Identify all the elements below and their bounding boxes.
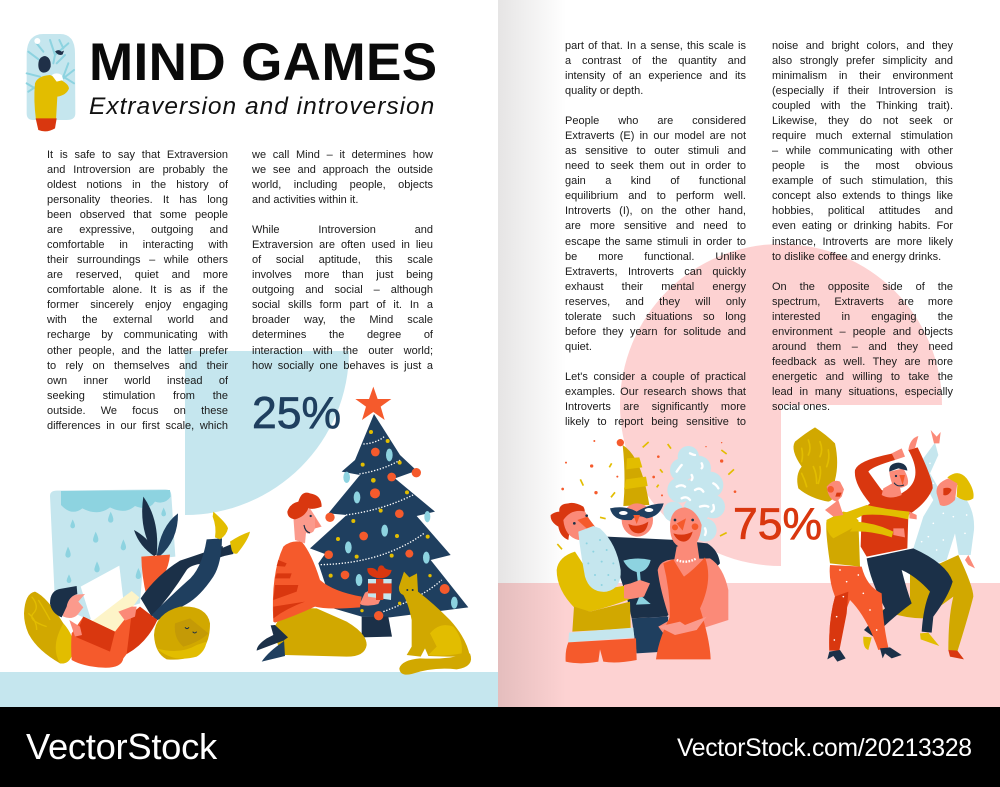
back dancer legs (882, 555, 973, 652)
bearded man (557, 552, 632, 612)
text column 4: feedback as well. They are more (772, 356, 953, 368)
masked man (607, 537, 720, 618)
text column 1: recharge by communicating with (47, 329, 228, 341)
text column 2: outgoing and social – although (252, 284, 433, 296)
text column 4: minimalism in their environment (772, 70, 953, 82)
text column 3: tolerate such situations so long (565, 311, 746, 323)
text column 1: and Introversion are probably the (47, 164, 228, 176)
text column 1: outside. We focus on these (47, 405, 228, 417)
text column 3: quality or depth. (565, 85, 643, 97)
left page floor band (0, 672, 498, 707)
text column 1: comfortable alone. It is as if the (47, 284, 228, 296)
text column 3: a contrast of the quantity and (565, 55, 746, 67)
text column 1 (47, 148, 228, 432)
text column 4: to dislike coffee and energy drinks. (772, 251, 941, 263)
text column 2: of social aptitude, this scale (252, 254, 433, 266)
text column 3: as sensitive to outer stimuli and (565, 145, 746, 157)
text column 4: – while communicating with other (772, 145, 953, 157)
text column 3: are more sensitive and need to (565, 220, 746, 232)
text column 1: other people, and the latter prefer (47, 345, 228, 357)
text column 3: escape the same stimuli in order to (565, 236, 746, 248)
scene: party group (551, 439, 736, 663)
text column 3: examples. Our research shows that (565, 386, 746, 398)
window with rain (50, 489, 175, 620)
text column 4 (772, 40, 953, 413)
text column 3: People who are considered (565, 115, 746, 127)
confetti (561, 440, 736, 496)
text column 2: interaction with the outer world; (252, 345, 433, 357)
text column 3: be more functional. Unlike (565, 251, 746, 263)
potted plant (134, 530, 155, 557)
text column 3: gain a kind of functional (565, 175, 746, 187)
text column 2: involves more than just being (252, 269, 433, 281)
text column 4: also strongly prefer simplicity and (772, 55, 953, 67)
cat curled (154, 607, 210, 660)
text column 1: former sincerely enjoy engaging (47, 299, 228, 311)
text column 4: On the opposite side of the (772, 281, 953, 293)
text column 4: (especially if their Introversion is (772, 85, 953, 97)
text column 2: we see and approach the outside (252, 164, 433, 176)
laptop pages (81, 566, 123, 622)
text column 4: even eating or drinking habits. For (772, 220, 953, 232)
text column 1: seeking stimulation from the (47, 390, 228, 402)
party hat (623, 445, 649, 506)
pie: 75% three-quarter disc (620, 244, 942, 566)
back dancer top (913, 443, 974, 563)
text column 4: social ones. (772, 401, 830, 413)
reading person legs (141, 546, 224, 617)
woman in yellow legs (829, 565, 888, 651)
text column 3: reserves, and they will only (565, 296, 746, 308)
pie: 25% quadrant (185, 351, 349, 515)
text column 3: Extraverts, Introverts can quickly (565, 266, 746, 278)
text column 4: lead in many situations, especially (772, 386, 953, 398)
text column 4: people is the most obvious (772, 160, 953, 172)
text column 2: determines the degree of (252, 329, 433, 341)
text column 3: Extraverts (E) in our model are not (565, 130, 746, 142)
cushion (24, 592, 74, 663)
text column 4: spectrum, Extraverts are more (772, 296, 953, 308)
title: MIND GAMES (89, 33, 438, 92)
text column 4: environment – people and objects (772, 326, 953, 338)
text column 4: noise and bright colors, and they (772, 40, 953, 52)
body (71, 608, 157, 668)
text column 2: we call Mind – it determines how (252, 148, 433, 160)
gift (368, 579, 392, 600)
head (61, 594, 85, 618)
tree (310, 414, 468, 617)
text column 1: to rely on themselves and their (47, 360, 228, 372)
text column 2: world, including people, objects (252, 179, 433, 191)
text column 3: equilibrium and to perform well. (565, 190, 746, 202)
icon: person at window (27, 34, 75, 131)
text column 4: energetic and willing to take the (772, 371, 953, 383)
text column 3: exhaust their mental energy (565, 281, 746, 293)
text column 2: and activities within it. (252, 194, 358, 206)
scene: dancers (793, 427, 975, 662)
text column 4: coupled with the Thinking trait). (772, 100, 953, 112)
man in red (864, 548, 953, 637)
text column 4: concept also extends to things like (772, 190, 953, 202)
text column 2: While Introversion and (252, 224, 433, 236)
text column 4: instance, Introverts are more likely (772, 236, 953, 248)
text column 4: around them – and they need (772, 341, 953, 353)
text column 2: Extraversion are often used in lieu (252, 239, 433, 251)
page fold shadow (498, 0, 566, 707)
cocktail glass (623, 558, 651, 605)
scene: introvert reading at window (24, 387, 471, 675)
leopard cat (399, 572, 470, 657)
text column 1: comfortable in interacting with (47, 239, 228, 251)
text column 2: how socially one behaves is just a (252, 360, 433, 372)
text column 2: social skills form part of it. In a (252, 299, 433, 311)
right page floor band (498, 583, 1000, 707)
woman with white hair (663, 446, 725, 542)
text column 4: require much external stimulation (772, 130, 953, 142)
footer bar (0, 707, 1000, 787)
man with gift (275, 608, 367, 657)
footer logo: VectorStock (26, 726, 217, 767)
statistic: 25%: 25% (252, 389, 341, 438)
text column 4: interested in engaging the (772, 311, 953, 323)
text column 3: likely to report being sensitive to (565, 416, 746, 428)
text column 1: with the external world and (47, 314, 228, 326)
text column 1: their surroundings – while others (47, 254, 228, 266)
text column 1: are expressive, outgoing and (47, 224, 228, 236)
footer url: VectorStock.com/20213328 (677, 735, 972, 762)
text column 3: Introverts (I), on the other hand, (565, 205, 746, 217)
text column 1: own inner world instead of (47, 375, 228, 387)
statistic: 75%: 75% (733, 500, 822, 549)
text column 1: differences in our first scale, which (47, 420, 228, 432)
text column 1: are reserved, quiet and more (47, 269, 228, 281)
text column 4: Likewise, they do not seek or (772, 115, 953, 127)
text column 1: been observed that some people (47, 209, 228, 221)
text column 1: personality theories. It has long (47, 194, 228, 206)
subtitle: Extraversion and introversion (89, 93, 435, 120)
text column 3: Introverts are significantly more (565, 401, 746, 413)
text column 3: need to seek them out in order to (565, 160, 746, 172)
text column 3: quiet. (565, 341, 592, 353)
text column 3: intensity of an experience and its (565, 70, 746, 82)
text column 1: oldest notions in the history of (47, 179, 228, 191)
text column 3 (565, 40, 746, 428)
text column 3: Let's consider a couple of practical (565, 371, 746, 383)
text column 4: example of such stimulation, this (772, 175, 953, 187)
text column 3: before they yearn for solitude and (565, 326, 746, 338)
text column 3: part of that. In a sense, this scale is (565, 40, 746, 52)
text column 1: It is safe to say that Extraversion (47, 148, 228, 160)
text column 2: broader way, the Mind scale (252, 314, 433, 326)
text column 4: hobbies, political attitudes and (772, 205, 953, 217)
text column 2 (252, 148, 433, 372)
